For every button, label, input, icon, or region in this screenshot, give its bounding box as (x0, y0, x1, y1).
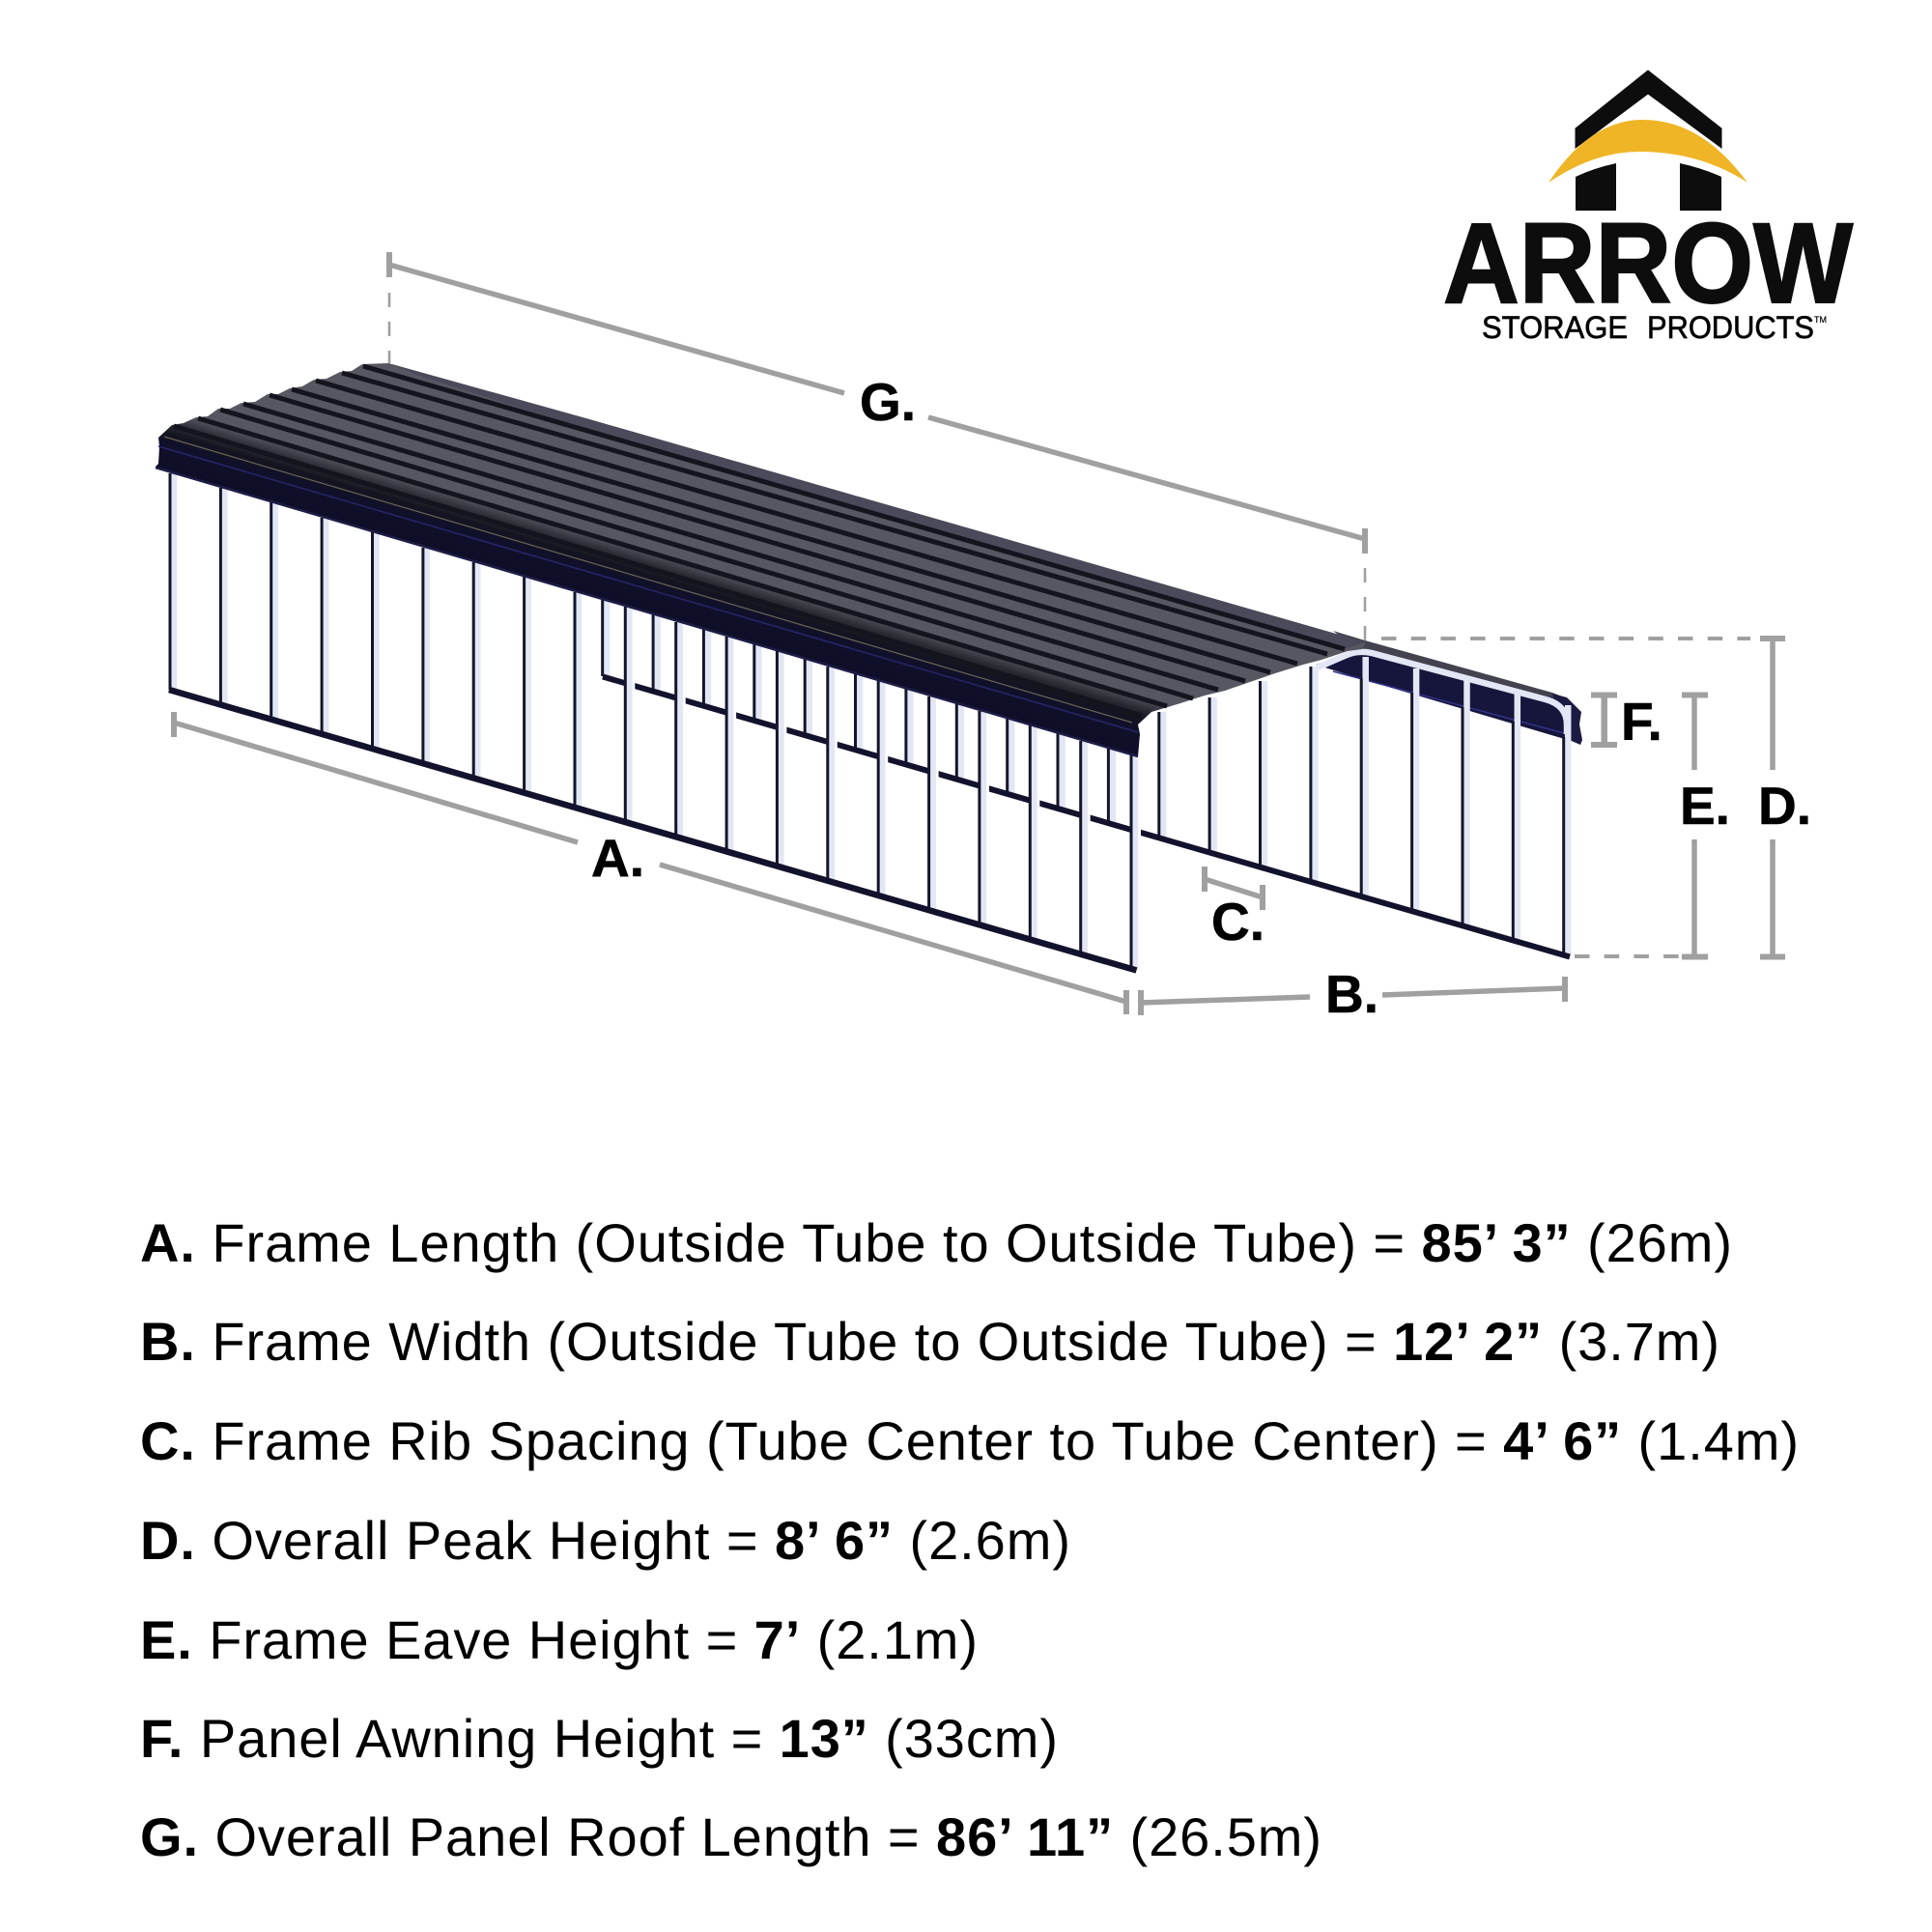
spec B: B. Frame Width (Outside Tube to Outside Tube) = 12’ 2” (3.7m) (140, 1311, 1719, 1372)
label D: D. (1758, 776, 1811, 836)
trademark: TM (1814, 315, 1827, 325)
logo tagline: STORAGE (1482, 310, 1628, 345)
label B: B. (1325, 964, 1378, 1024)
dimension A (174, 712, 1126, 1014)
near side wall ribs (170, 473, 1135, 969)
label G: G. (860, 372, 916, 432)
icon: yellow arc (1548, 120, 1747, 183)
far side awning (1316, 631, 1582, 745)
eave bottom edge (156, 468, 1138, 756)
near side bottom rail (169, 690, 1136, 970)
eave highlight line (164, 437, 1132, 723)
icon: house roof (1576, 71, 1721, 148)
far side frame arch (1318, 652, 1567, 734)
far side wall ribs (603, 598, 1568, 954)
logo tagline (1482, 310, 1814, 345)
dimension D (1381, 639, 1811, 956)
dimension B (1141, 964, 1565, 1024)
eave blue line (158, 446, 1138, 732)
far side bottom rail (603, 676, 1570, 956)
roof panel (156, 363, 1366, 756)
label A: A. (591, 828, 644, 888)
dimension F (1591, 692, 1662, 752)
icon: left door block (1576, 163, 1616, 211)
roof corrugation ribs (174, 366, 1345, 716)
logo wordmark: ARROW (1443, 200, 1854, 327)
spec D: D. Overall Peak Height = 8’ 6” (2.6m) (140, 1510, 1070, 1571)
label F: F. (1621, 692, 1662, 752)
spec E: E. Frame Eave Height = 7’ (2.1m) (140, 1609, 978, 1670)
near side white gaps (226, 488, 1136, 969)
dimension C (1205, 867, 1264, 952)
roof upper strip (388, 363, 1366, 648)
logo tagline: PRODUCTS (1647, 310, 1814, 345)
carport drawing (156, 363, 1582, 970)
specification list (140, 1212, 1799, 1867)
spec G: G. Overall Panel Roof Length = 86’ 11” (26.5m) (140, 1806, 1321, 1867)
icon: right door block (1680, 163, 1721, 211)
dimension G (389, 252, 1365, 641)
spec F: F. Panel Awning Height = 13” (33cm) (140, 1708, 1058, 1769)
label C: C. (1211, 892, 1264, 952)
spec C: C. Frame Rib Spacing (Tube Center to Tube Center) = 4’ 6” (1.4m) (140, 1410, 1799, 1471)
logo: Arrow Storage Products (1443, 71, 1854, 345)
dimension E (1575, 696, 1730, 956)
spec A: A. Frame Length (Outside Tube to Outside Tube) = 85’ 3” (26m) (140, 1212, 1732, 1273)
label E: E. (1680, 776, 1730, 836)
